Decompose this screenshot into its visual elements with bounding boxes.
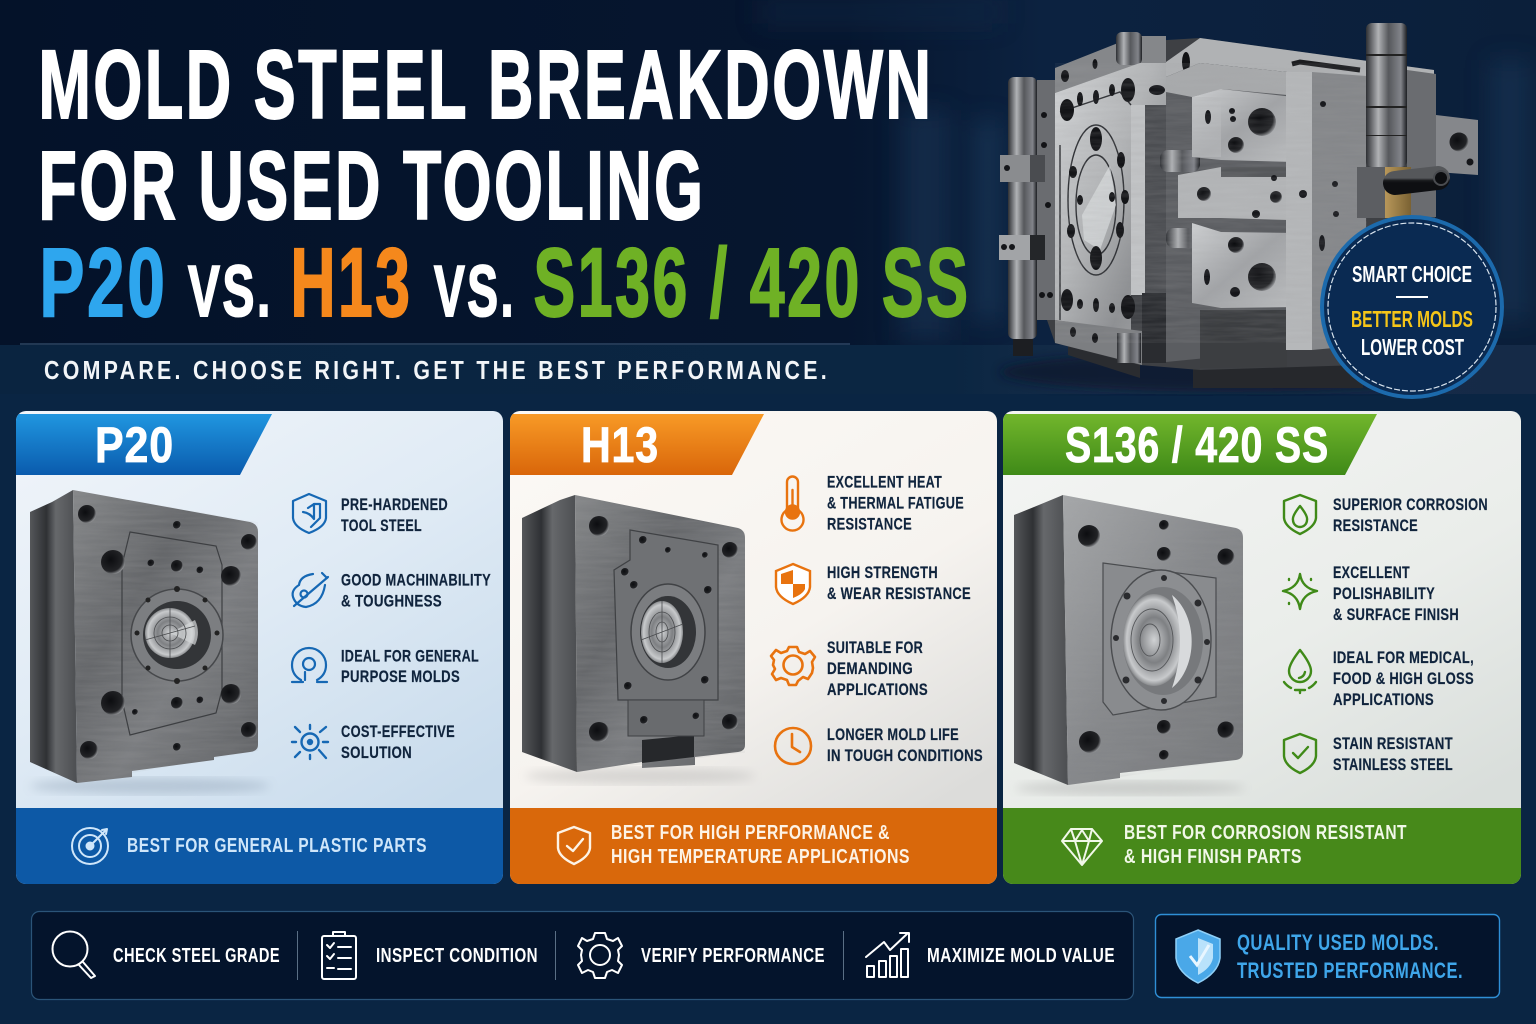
icon: rising chart: [866, 933, 909, 977]
text: polish: EXCELLENT: [1333, 564, 1410, 582]
text: strength: & WEAR RESISTANCE: [827, 585, 971, 603]
text: general purpose: IDEAL FOR GENERAL: [341, 648, 479, 666]
text: pre-hardened: PRE-HARDENED: [341, 496, 448, 514]
text: maximize mold value: MAXIMIZE MOLD VALUE: [927, 945, 1115, 967]
text: corrosion: RESISTANCE: [1333, 517, 1418, 535]
icon: clock: [775, 728, 811, 764]
text: medical: APPLICATIONS: [1333, 691, 1434, 709]
text: machinability: GOOD MACHINABILITY: [341, 572, 491, 590]
title: [38, 30, 970, 337]
text: corrosion: SUPERIOR CORROSION: [1333, 496, 1488, 514]
text: cost effective: [341, 725, 454, 758]
trust text: QUALITY USED MOLDS.: [1237, 930, 1439, 955]
text: medical: IDEAL FOR MEDICAL,: [1333, 649, 1474, 667]
S136 best-for bar: BEST FOR CORROSION RESISTANT: [1124, 822, 1407, 844]
badge text: LOWER COST: [1361, 334, 1464, 360]
P20 best-for bar: [16, 808, 503, 884]
icon: clipboard: [322, 932, 356, 979]
P20 header tab: [16, 414, 272, 475]
text: medical: [1333, 649, 1474, 709]
text: medical: FOOD & HIGH GLOSS: [1333, 670, 1474, 688]
text: polish: & SURFACE FINISH: [1333, 606, 1459, 624]
H13 best-for bar: [510, 808, 997, 884]
panel: P20: [16, 411, 503, 884]
badge: [1322, 217, 1502, 397]
text: demanding: SUITABLE FOR: [827, 639, 923, 657]
text: check steel grade: CHECK STEEL GRADE: [113, 945, 280, 967]
text: strength: HIGH STRENGTH: [827, 564, 938, 582]
left front plate: [1055, 63, 1166, 331]
title line 3 comparison: P20: [40, 228, 168, 337]
H13 header tab: [510, 414, 764, 475]
title line 3 comparison: VS.: [434, 252, 516, 332]
badge text: [1351, 261, 1473, 360]
S136 best-for bar: & HIGH FINISH PARTS: [1124, 846, 1302, 868]
icon: wrench: [293, 573, 328, 607]
text: general purpose: PURPOSE MOLDS: [341, 668, 460, 686]
icon: shield check: [1176, 930, 1220, 983]
S136 mold image: [1014, 495, 1245, 795]
text: machinability: & TOUGHNESS: [341, 592, 442, 610]
P20 best-for bar: BEST FOR GENERAL PLASTIC PARTS: [127, 835, 427, 857]
text: pre-hardened: [341, 498, 448, 532]
icon: gear: [578, 933, 622, 978]
text: strength: [828, 566, 970, 600]
P20 mold image: [30, 490, 270, 794]
S136 header tab: S136 / 420 SS: [1065, 417, 1329, 473]
icon: shield check: [1284, 734, 1316, 773]
text: cost effective: COST-EFFECTIVE: [341, 723, 455, 741]
text: machinability: [341, 574, 491, 607]
H13 mold image: [522, 495, 755, 784]
text: demanding: [827, 639, 928, 699]
text: heat: EXCELLENT HEAT: [827, 474, 942, 492]
icon: drop: [1284, 650, 1316, 693]
text: polish: [1334, 566, 1458, 620]
H13 feature list: [771, 474, 983, 765]
text: inspect condition: INSPECT CONDITION: [376, 945, 538, 967]
icon: shield drop: [1284, 495, 1316, 534]
title line 3 comparison: [40, 228, 970, 337]
text: demanding: APPLICATIONS: [827, 681, 928, 699]
top slab: [1055, 36, 1166, 93]
text: stainless: STAINLESS STEEL: [1333, 756, 1453, 774]
left guide pillar: [1008, 77, 1037, 339]
text: pre-hardened: TOOL STEEL: [341, 517, 422, 535]
icon: gear: [771, 647, 815, 685]
text: heat: [827, 474, 964, 534]
panel: H13: [510, 411, 997, 884]
bottom checklist bar: [32, 912, 1134, 1000]
text: heat: RESISTANCE: [827, 516, 912, 534]
text: mold life: LONGER MOLD LIFE: [827, 726, 959, 744]
lower block: [1192, 223, 1294, 308]
text: general purpose: [342, 650, 478, 682]
title line 2: FOR USED TOOLING: [38, 131, 706, 240]
title line 3 comparison: VS.: [188, 252, 273, 332]
title line 3 comparison: H13: [290, 228, 412, 337]
text: stainless: [1333, 737, 1453, 770]
panel: S136 / 420 SS: [1003, 411, 1521, 884]
H13 best-for bar: HIGH TEMPERATURE APPLICATIONS: [611, 846, 910, 868]
vertical bar and right face: [1286, 72, 1312, 350]
left plate circle: [1060, 92, 1131, 320]
S136 best-for bar: [1003, 808, 1521, 884]
text: heat: & THERMAL FATIGUE: [827, 494, 964, 512]
text: cost effective: SOLUTION: [341, 744, 412, 762]
trust text: [1237, 930, 1463, 983]
text: demanding: DEMANDING: [827, 660, 913, 678]
trust text: TRUSTED PERFORMANCE.: [1237, 958, 1463, 983]
badge text: BETTER MOLDS: [1351, 306, 1473, 332]
subtitle: COMPARE. CHOOSE RIGHT. GET THE BEST PERFORMANCE.: [44, 355, 830, 385]
middle block: [1178, 167, 1288, 220]
H13 header tab: H13: [581, 417, 659, 473]
icon: shield: [776, 564, 810, 604]
icon: shield leaf: [293, 494, 326, 533]
title line 1: MOLD STEEL BREAKDOWN: [38, 30, 934, 139]
icon: sparkle: [1283, 574, 1317, 609]
left sub plate: [1037, 80, 1055, 320]
metal texture: [1055, 63, 1367, 343]
hero mold photo: [999, 23, 1478, 392]
P20 feature list: [292, 494, 491, 762]
H13 best-for bar: BEST FOR HIGH PERFORMANCE &: [611, 822, 890, 844]
icon: magnifier: [52, 932, 95, 978]
icon: thermometer: [782, 477, 804, 531]
P20 header tab: P20: [95, 417, 174, 473]
text: mold life: IN TOUGH CONDITIONS: [827, 747, 983, 765]
text: corrosion: [1333, 498, 1487, 532]
icon: sun target: [292, 725, 328, 759]
right pillar: [1366, 23, 1407, 167]
center column: [1166, 63, 1287, 362]
text: stainless: STAIN RESISTANT: [1333, 735, 1453, 753]
text: polish: POLISHABILITY: [1333, 585, 1435, 603]
trust box: [1156, 914, 1500, 998]
text: mold life: [828, 728, 982, 762]
icon: arc gauge: [292, 648, 327, 682]
pipe: [1292, 62, 1360, 70]
S136 feature list: [1283, 495, 1488, 774]
badge text: SMART CHOICE: [1352, 261, 1472, 287]
title line 3 comparison: S136 / 420 SS: [534, 228, 970, 337]
text: verify performance: VERIFY PERFORMANCE: [641, 945, 825, 967]
upper block: [1192, 89, 1294, 162]
bulk: [1040, 38, 1436, 370]
